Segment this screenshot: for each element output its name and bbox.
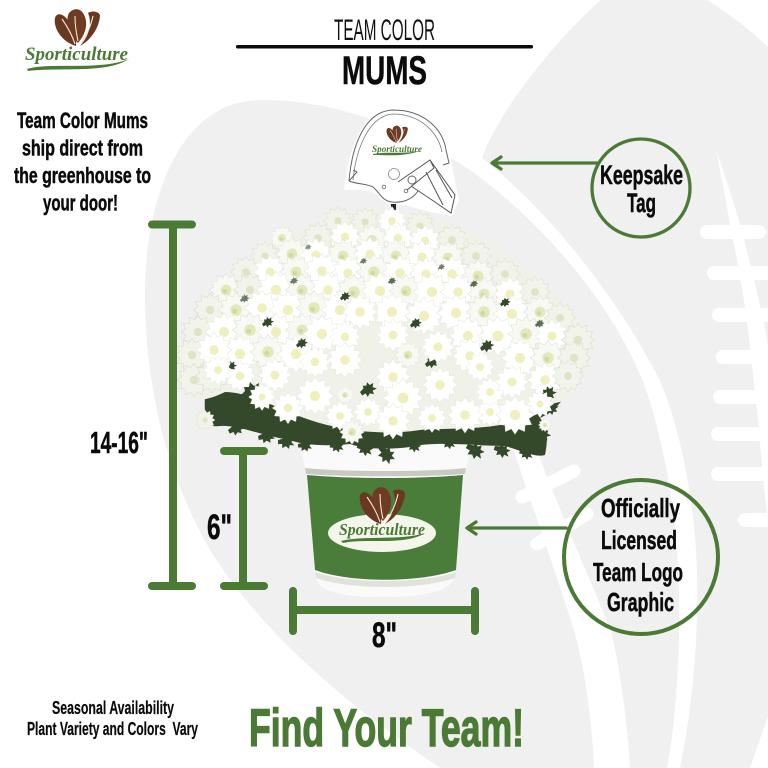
pot logo: Sporticulture <box>339 520 425 539</box>
callout: officially licensed team logo graphic: Graphic <box>607 587 674 617</box>
background: right football laces <box>707 150 768 520</box>
dimension: pot width <box>293 591 475 631</box>
dome flowers: rows <box>175 206 595 398</box>
background: left football laces <box>512 445 630 768</box>
label: 6 inches: 6" <box>207 508 232 547</box>
callout: officially licensed team logo graphic: Team Logo <box>593 557 683 587</box>
title: TEAM COLOR <box>334 14 435 47</box>
foliage <box>203 340 565 466</box>
callout: officially licensed team logo graphic <box>564 480 718 634</box>
flower dome base <box>181 210 596 432</box>
label: 8 inches: 8" <box>372 616 397 655</box>
callout: keepsake tag: Tag <box>627 188 656 218</box>
callout: officially licensed team logo graphic: Licensed <box>601 525 677 555</box>
background: left football <box>145 100 679 768</box>
dimension: plant height <box>152 224 192 586</box>
icon: keepsake helmet tag <box>344 107 459 226</box>
availability note: Plant Variety and Colors Vary <box>27 719 198 739</box>
pot green label band <box>307 475 463 580</box>
sporticulture brand logo: Sporticulture <box>25 44 129 65</box>
callout: officially licensed team logo graphic: Officially <box>601 493 680 523</box>
call to action: find your team: Find Your Team! <box>249 699 524 758</box>
background: right football <box>482 0 768 768</box>
arrow: to team logo <box>467 522 566 534</box>
shipping text block: your door! <box>43 190 118 216</box>
callout: keepsake tag: Keepsake <box>600 160 683 190</box>
shipping text block <box>14 108 151 216</box>
mum plant <box>175 206 596 466</box>
availability note: Seasonal Availability <box>52 698 174 718</box>
title: MUMS <box>342 49 427 93</box>
sporticulture brand logo <box>25 9 129 71</box>
icon: keepsake helmet tag: Sporticulture <box>372 144 422 154</box>
dimension: pot height <box>224 451 264 586</box>
arrow: to keepsake tag <box>492 157 597 169</box>
shipping text block: ship direct from <box>22 136 143 160</box>
shipping text block: Team Color Mums <box>17 108 148 133</box>
pot logo <box>328 487 436 552</box>
shipping text block: the greenhouse to <box>14 163 151 188</box>
title <box>236 14 533 93</box>
callout: keepsake tag <box>592 139 690 237</box>
pot <box>300 441 472 597</box>
shaded gaps between flowers <box>225 244 557 403</box>
dome flowers: large front blooms <box>195 294 553 444</box>
label: 14-16 inches: 14-16" <box>90 425 148 460</box>
availability note <box>27 698 198 739</box>
